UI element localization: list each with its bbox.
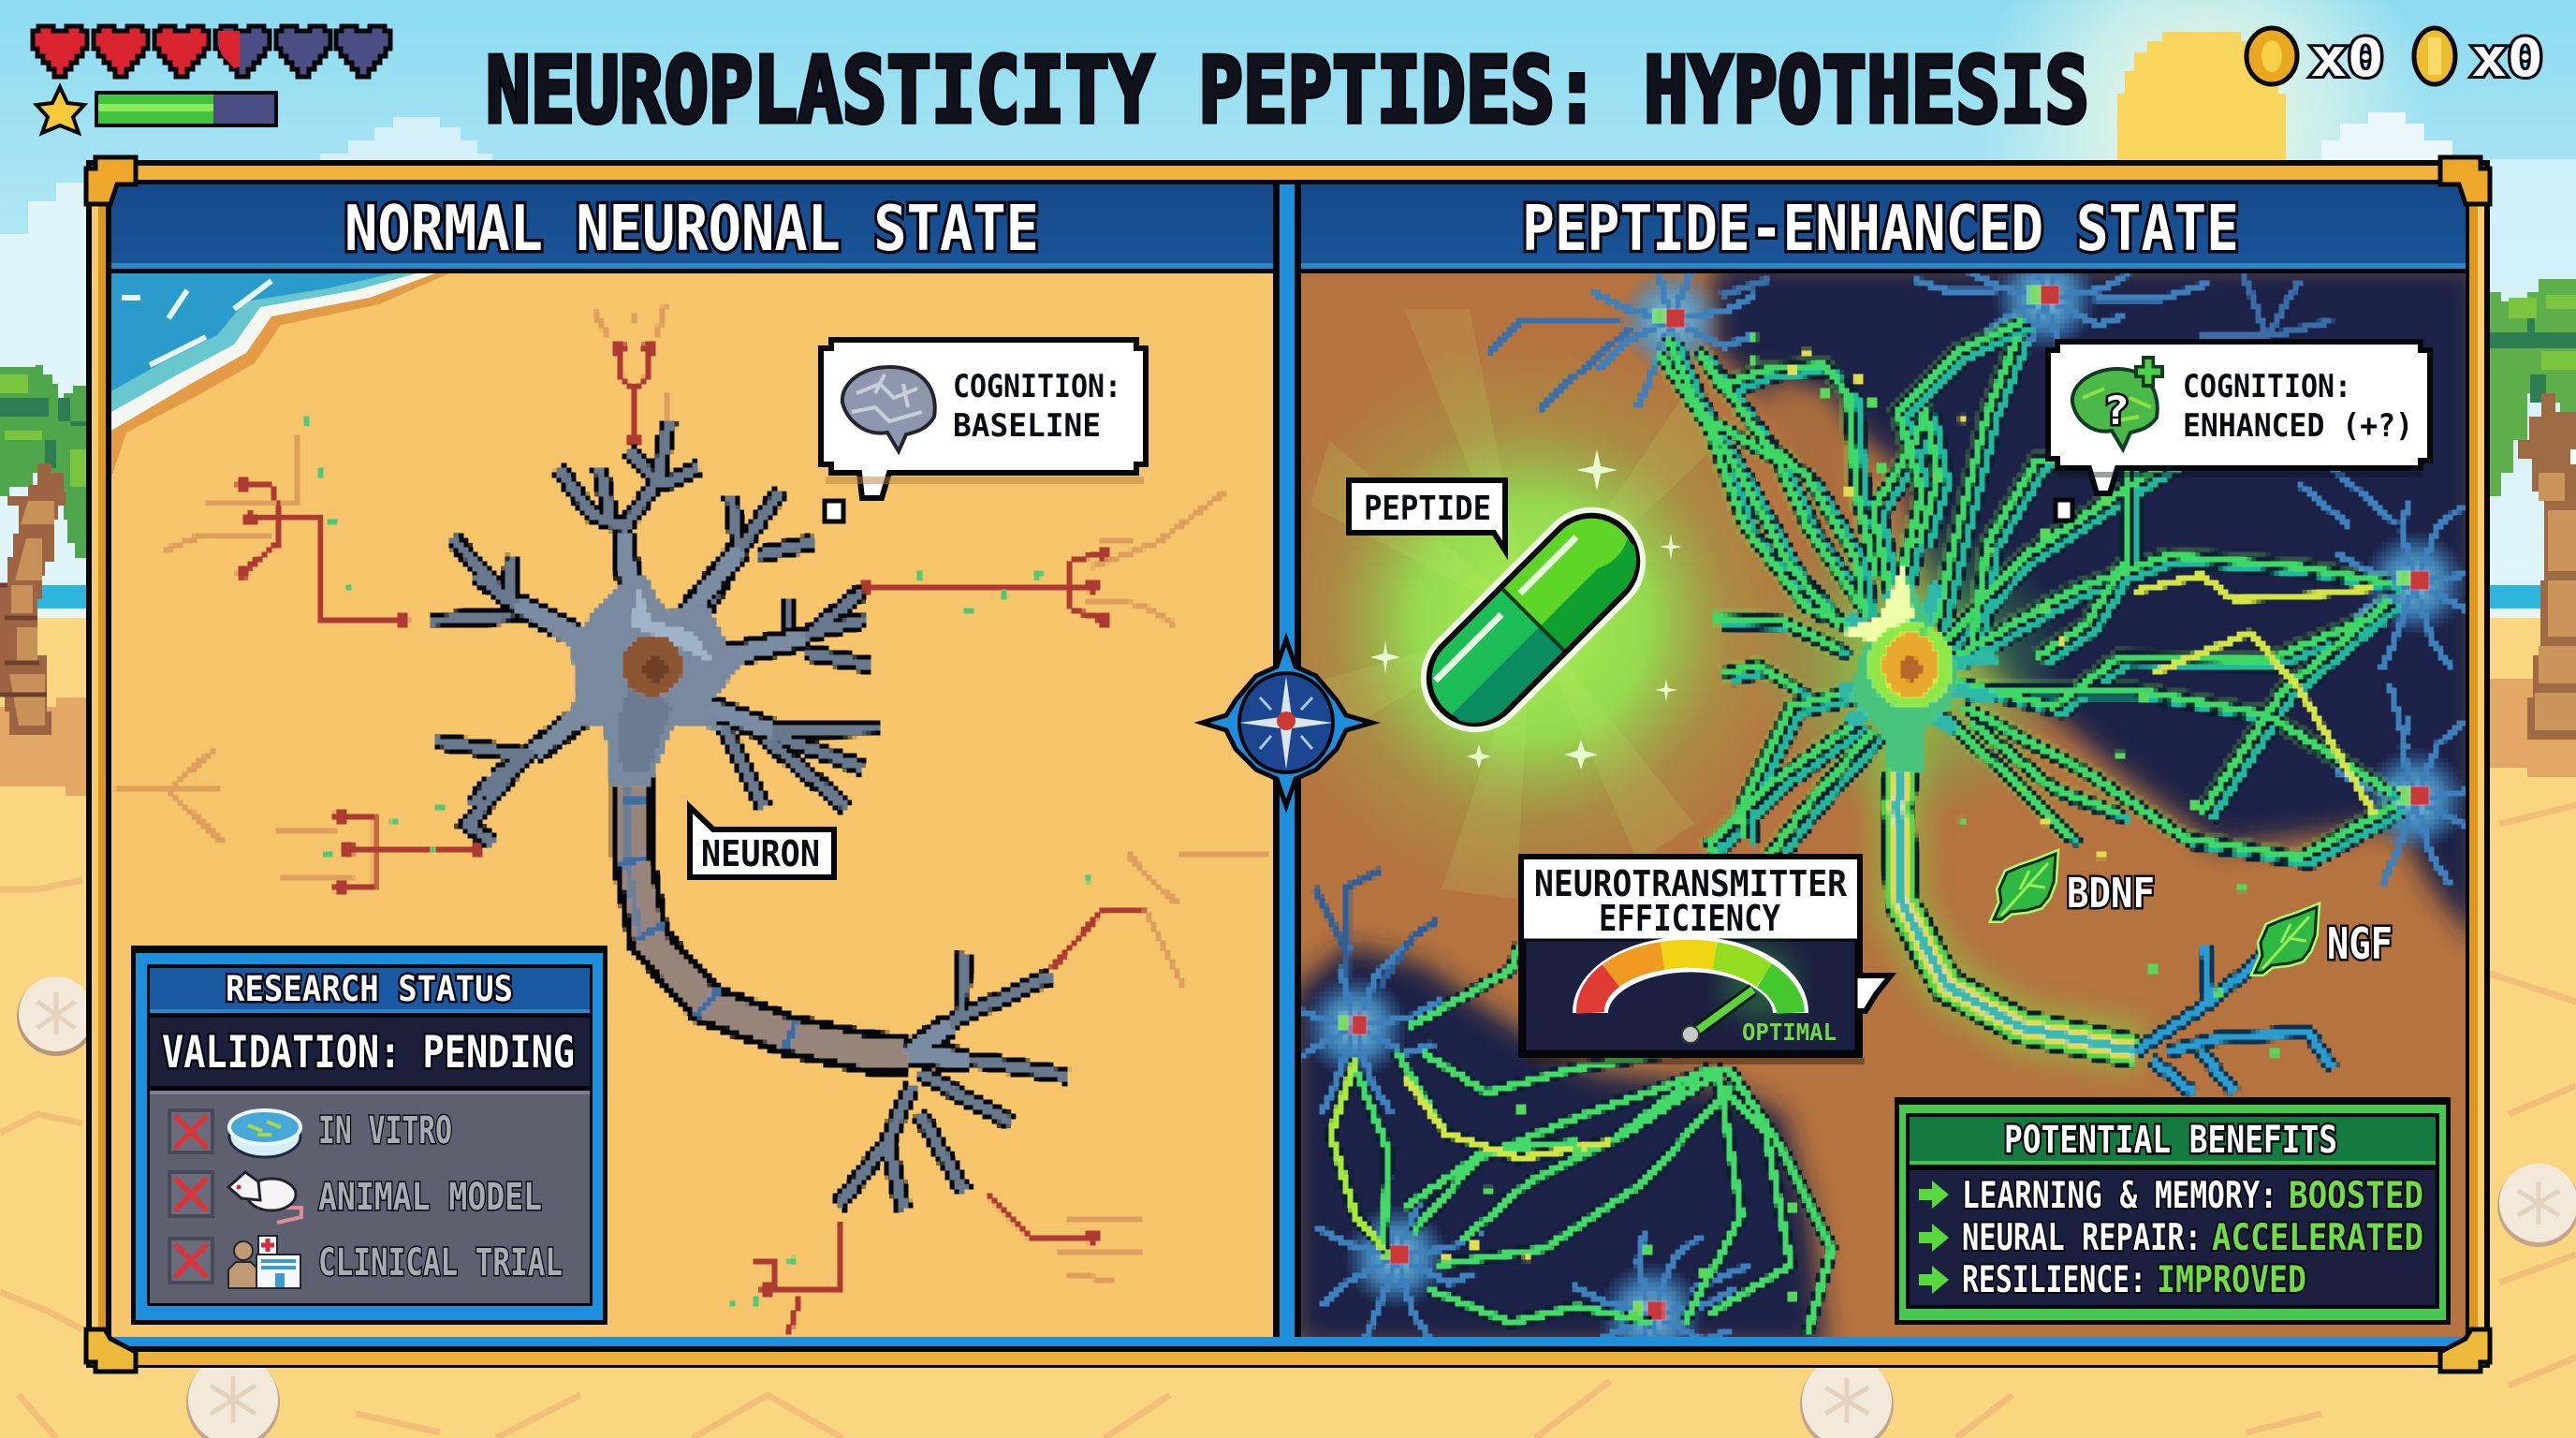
icon: brain gray [842, 367, 935, 451]
yellow highlight dendrites [1405, 575, 2374, 1158]
background: sky [0, 0, 2576, 618]
text: cognition enhanced: COGNITION: [2183, 368, 2351, 405]
label: neuron: NEURON [701, 833, 820, 874]
row: resilience [1919, 1259, 2306, 1301]
hud: coin counter two: x0 [2471, 28, 2543, 89]
row: resilience: RESILIENCE: [1962, 1259, 2146, 1301]
hud: coin counter one: x0 [2310, 28, 2384, 89]
icon: person and hospital [228, 1236, 300, 1288]
icon: petri dish [229, 1110, 300, 1157]
right palm tree [2490, 279, 2576, 740]
axon [618, 731, 907, 1055]
text: neurotransmitter efficiency: EFFICIENCY [1599, 898, 1780, 939]
axon enhanced [1897, 740, 2136, 1051]
research status header: RESEARCH STATUS [226, 969, 513, 1009]
icon: peptide capsule [1398, 485, 1668, 755]
row: clinical trial [169, 1236, 563, 1288]
panel: potential benefits [1895, 1097, 2451, 1325]
hud: coin counter one [2247, 28, 2384, 89]
gauge [1590, 946, 1797, 1043]
text: optimal: OPTIMAL [1742, 1019, 1837, 1046]
hud: energy bar [95, 91, 278, 127]
nucleus [621, 634, 683, 697]
frame corners [86, 157, 2490, 1372]
icon: compass [1202, 639, 1372, 806]
benefits header [1910, 1117, 2436, 1165]
icon: brain green with question and plus [2072, 356, 2164, 449]
panel: normal neuronal state [111, 273, 1273, 1337]
dendrite bases [518, 534, 969, 1060]
callout: cognition enhanced [2048, 342, 2430, 521]
text: neurotransmitter efficiency: NEUROTRANSMITTER [1534, 863, 1847, 904]
validation pending [150, 1018, 590, 1086]
validation pending: VALIDATION: PENDING [162, 1027, 575, 1078]
floating particles [1486, 339, 2276, 1314]
glow: axon [1898, 740, 2144, 1049]
benefits header: POTENTIAL BENEFITS [2004, 1119, 2337, 1162]
header bar: peptide-enhanced state [1301, 184, 2466, 269]
label: ngf leaf: NGF [2327, 918, 2393, 969]
label: neuron [690, 807, 834, 877]
brown gaps within the field [1756, 361, 1854, 565]
faint red network [115, 304, 1268, 1334]
row: clinical trial: CLINICAL TRIAL [318, 1241, 563, 1284]
glow: pill [1301, 367, 1784, 874]
panel: peptide-enhanced state [1301, 273, 2466, 1337]
neuron [431, 422, 1068, 1210]
teal dendrite bases [1840, 583, 1996, 731]
frame: outer black and gold [86, 160, 2490, 1368]
row: animal model: ANIMAL MODEL [318, 1176, 542, 1219]
text: cognition baseline [953, 368, 1121, 445]
text: cognition baseline: BASELINE [953, 407, 1101, 445]
hud: hearts [33, 26, 390, 77]
title: NEUROPLASTICITY PEPTIDES: HYPOTHESIS [486, 37, 2089, 143]
soma [534, 575, 753, 785]
row: resilience: IMPROVED [2157, 1259, 2306, 1301]
dark sand patches [0, 679, 2576, 796]
sand [0, 618, 2576, 1438]
sea horizon [0, 585, 2576, 609]
enhanced neuron network [1301, 273, 2466, 1337]
text: neurotransmitter efficiency [1534, 863, 1847, 939]
label: bdnf leaf: BDNF [2067, 870, 2155, 917]
label: bdnf leaf [1994, 854, 2155, 919]
text: cognition enhanced [2183, 368, 2413, 445]
dendrite layers [1331, 320, 2405, 1334]
research status header [150, 968, 590, 1013]
sparkles [1370, 449, 1682, 770]
center divider [1280, 184, 1295, 1346]
beach corner [111, 273, 449, 477]
label: peptide [1349, 480, 1505, 550]
gauge needle [1690, 990, 1753, 1035]
panel: research status [131, 946, 607, 1325]
row: in vitro [169, 1109, 452, 1157]
dendrite outlines [431, 422, 1068, 1210]
icon: brain green with question and plus: ? [2103, 388, 2130, 433]
bottom bar blue [111, 1337, 2466, 1346]
checklist [150, 1091, 590, 1303]
panel: neurotransmitter efficiency [1521, 857, 1891, 1064]
header bar: normal neuronal state [111, 184, 1273, 269]
row: animal model [169, 1172, 542, 1223]
satellite neurons [1301, 273, 2466, 1337]
sun [2117, 32, 2286, 161]
sun glow [1977, 0, 2426, 337]
right panel brown ground [1301, 273, 2466, 1337]
hud: coin counter two [2414, 28, 2543, 89]
row: neural repair: NEURAL REPAIR: [1962, 1217, 2202, 1259]
text: cognition enhanced: ENHANCED (+?) [2183, 407, 2413, 445]
sand dollars [17, 976, 2576, 1438]
axon terminals [2136, 945, 2333, 1093]
row: neural repair: ACCELERATED [2212, 1217, 2423, 1259]
benefits list [1910, 1170, 2436, 1305]
light rays [1310, 309, 1722, 899]
dark neural field: lower left [1292, 946, 1825, 1348]
row: learning and memory: BOOSTED [2289, 1175, 2423, 1217]
icon: mouse [228, 1172, 301, 1223]
left panel sand [111, 273, 1273, 1337]
header bar: normal neuronal state: NORMAL NEURONAL STATE [344, 192, 1039, 265]
callout: cognition baseline [821, 340, 1146, 521]
header bar: peptide-enhanced state: PEPTIDE-ENHANCED STATE [1522, 192, 2239, 265]
hud: star [37, 87, 84, 133]
soma enhanced [1840, 566, 1958, 772]
label: peptide: PEPTIDE [1364, 490, 1491, 528]
row: neural repair [1919, 1217, 2423, 1259]
left palm tree [0, 365, 86, 735]
glow: soma [1765, 520, 2059, 808]
clouds [0, 112, 2576, 580]
row: learning and memory: LEARNING & MEMORY: [1962, 1175, 2277, 1217]
label: ngf leaf [2255, 907, 2393, 973]
gauge box [1525, 940, 1856, 1051]
dark neural field: upper right [1713, 262, 2481, 946]
dune strokes [0, 805, 2576, 1438]
row: in vitro: IN VITRO [318, 1109, 452, 1152]
text: cognition baseline: COGNITION: [953, 368, 1121, 405]
